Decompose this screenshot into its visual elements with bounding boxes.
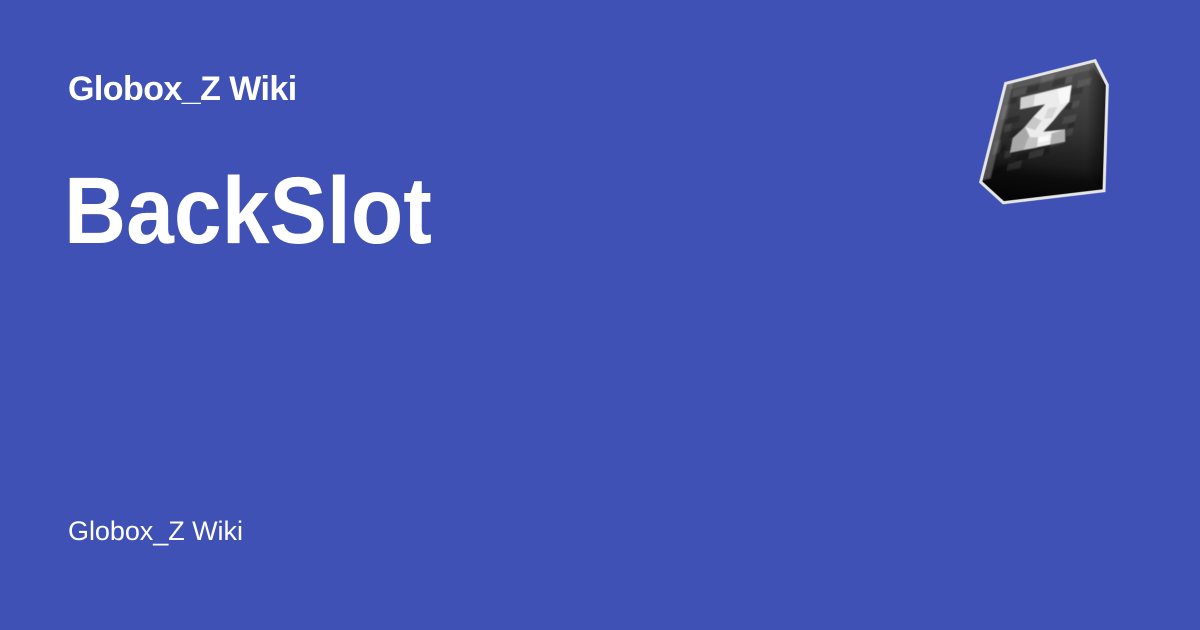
tile pixel cells (992, 74, 1092, 171)
footer site name: Globox_Z Wiki (68, 516, 243, 546)
icon: back slot Z tile (978, 58, 1110, 204)
tile body (981, 61, 1107, 203)
Z letter shading (1010, 85, 1072, 153)
tile top light edge (1008, 62, 1094, 89)
tile right dark side (1090, 66, 1106, 179)
tile outline (981, 61, 1107, 203)
site name heading: Globox_Z Wiki (68, 70, 297, 108)
Z letter (1010, 85, 1072, 153)
page title: BackSlot (64, 158, 432, 264)
tile left light edge (982, 82, 1013, 181)
tile texture and shading (982, 62, 1106, 181)
